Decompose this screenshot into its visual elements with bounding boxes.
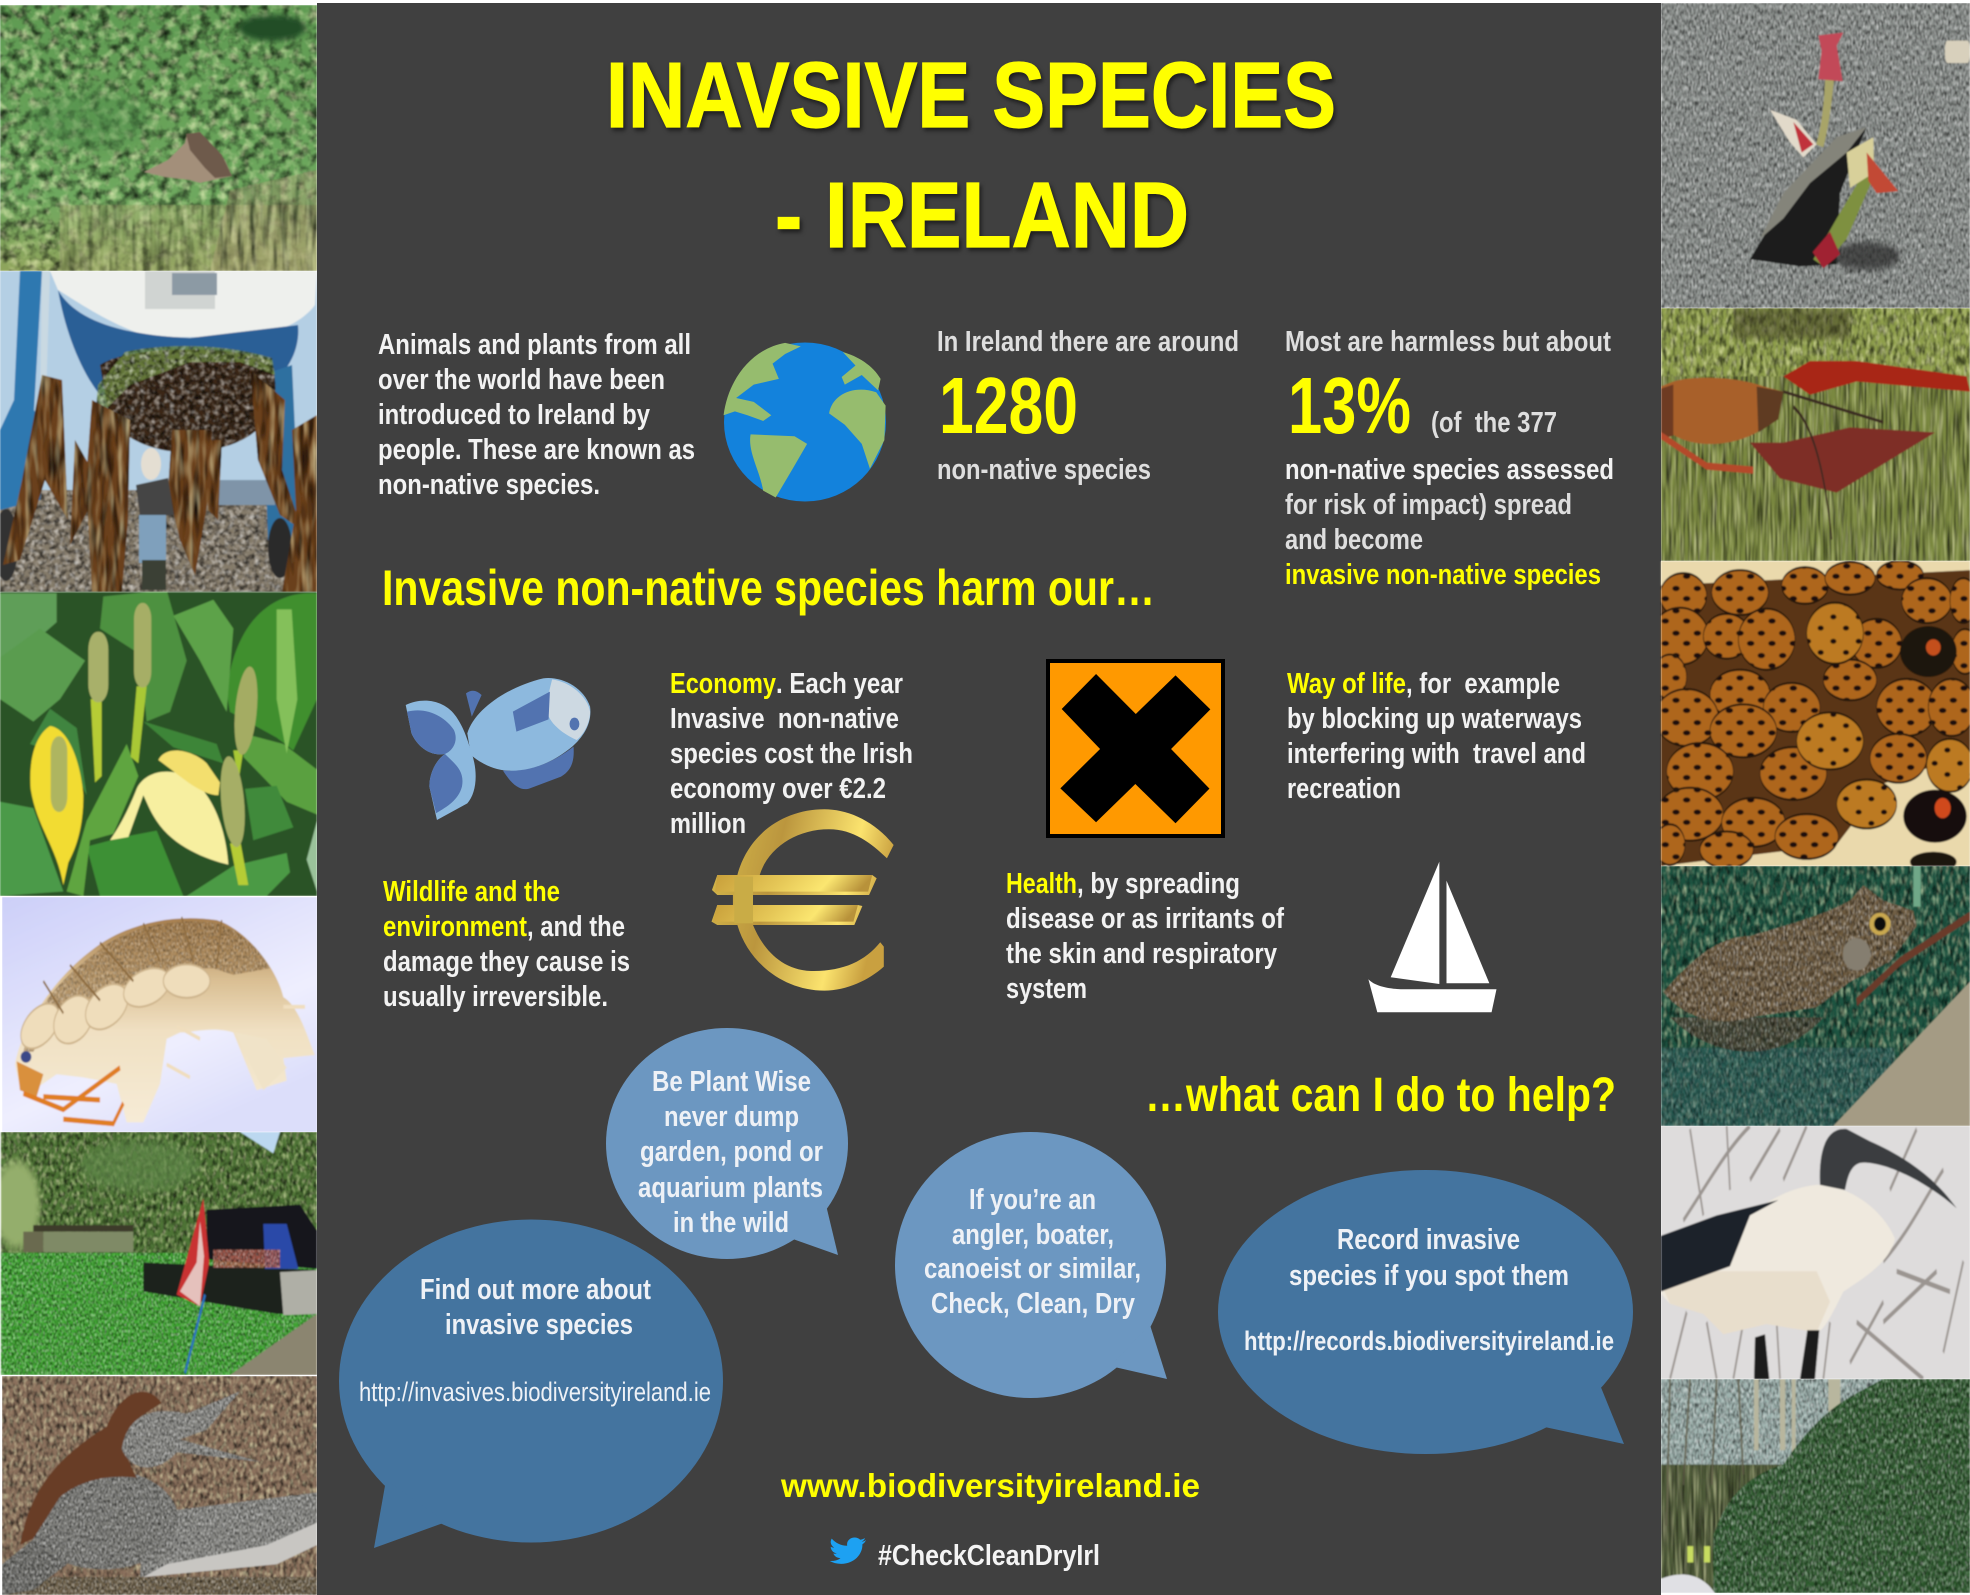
heading: harm: Invasive non-native species harm our…: [382, 560, 1155, 616]
icon: euro symbol: [711, 809, 894, 991]
photo: boat hull covered with seaweed: [0, 271, 317, 592]
text block: economy: economy over €2.2: [670, 773, 886, 805]
speech bubble: be plant wise: garden, pond or: [640, 1136, 823, 1168]
text block: introduction: over the world have been: [378, 364, 665, 396]
speech bubble: record species: http://records.biodiversityireland.ie: [1244, 1326, 1614, 1356]
text block: introduction: non-native species.: [378, 469, 600, 501]
text block: wildlife: environment: [383, 911, 527, 943]
stat: 13 percent invasive: (of the 377: [1431, 407, 1557, 439]
text block: health: [1006, 868, 1284, 1005]
text block: economy: Invasive non-native: [670, 703, 899, 735]
speech bubble: record species: [1218, 1170, 1633, 1454]
text block: wildlife: damage they cause is: [383, 946, 630, 978]
text block: economy: species cost the Irish: [670, 738, 913, 770]
photo: knotweed shoots in gravel: [1661, 3, 1970, 308]
text block: economy: [670, 668, 913, 840]
speech bubble: be plant wise: aquarium plants: [638, 1172, 823, 1204]
speech bubble: be plant wise: in the wild: [673, 1207, 789, 1239]
photo: bullfrog in water: [1661, 866, 1970, 1126]
speech bubble: find out more: invasive species: [445, 1309, 633, 1341]
photo: rhododendron thicket along a path: [1661, 1379, 1970, 1593]
text block: health: the skin and respiratory: [1006, 938, 1277, 970]
stat: 13 percent invasive: [1285, 326, 1614, 591]
icon: twitter bird: [830, 1538, 866, 1564]
stat: 13 percent invasive: Most are harmless but about: [1285, 326, 1611, 358]
stat: 13 percent invasive: non-native species assessed: [1285, 454, 1614, 486]
text block: economy: . Each year: [776, 668, 903, 700]
stat: 1280 non-native species: [937, 326, 1239, 486]
photo: signal crayfish: [1661, 308, 1970, 561]
title: [606, 43, 1336, 267]
text block: way of life: , for example: [1406, 668, 1560, 700]
text block: introduction: introduced to Ireland by: [378, 399, 650, 431]
text block: health: , by spreading: [1077, 868, 1240, 900]
speech bubble: check clean dry: Check, Clean, Dry: [931, 1288, 1135, 1320]
text block: health: disease or as irritants of: [1006, 903, 1284, 935]
stat: 1280 non-native species: 1280: [939, 361, 1078, 450]
photo: sacred ibis: [1661, 1126, 1970, 1379]
stat: 13 percent invasive: for risk of impact) spread: [1285, 489, 1572, 521]
photo: mink attacking gannet: [2, 1376, 317, 1595]
stat: 13 percent invasive: 13%: [1288, 361, 1411, 450]
speech bubble: be plant wise: Be Plant Wise: [652, 1066, 811, 1098]
text block: health: Health: [1006, 868, 1077, 900]
text block: health: system: [1006, 973, 1087, 1005]
title: - IRELAND: [775, 163, 1189, 267]
icon: sailing boat: [1368, 862, 1496, 1012]
speech bubble: record species: Record invasive: [1337, 1224, 1520, 1256]
text block: introduction: [378, 329, 695, 501]
title: INAVSIVE SPECIES: [606, 43, 1336, 147]
speech bubble: check clean dry: canoeist or similar,: [924, 1253, 1141, 1285]
heading: what can I do: …what can I do to help?: [1145, 1069, 1616, 1122]
speech bubble: find out more: Find out more about: [420, 1274, 651, 1306]
text block: economy: Economy: [670, 668, 776, 700]
speech bubble: check clean dry: If you’re an: [969, 1184, 1096, 1216]
icon: hazard sign: [1046, 659, 1225, 838]
text block: way of life: recreation: [1287, 773, 1401, 805]
text block: introduction: Animals and plants from all: [378, 329, 691, 361]
photo: harlequin ladybirds: [1652, 561, 1970, 872]
icon: fish: [406, 678, 590, 820]
icon: globe: [724, 342, 886, 502]
photo: canal covered in water plants with narrowboat: [0, 1132, 317, 1375]
text block: wildlife: Wildlife and the: [383, 876, 560, 908]
stat: 13 percent invasive: and become: [1285, 524, 1423, 556]
photo: water plant with sheep: [0, 5, 317, 271]
panel: dark background: [317, 3, 1661, 1595]
photo: freshwater amphipod: [2, 897, 317, 1132]
speech bubble: check clean dry: angler, boater,: [952, 1219, 1114, 1251]
text block: wildlife: , and the: [527, 911, 625, 943]
text block: wildlife: usually irreversible.: [383, 981, 608, 1013]
text block: way of life: Way of life: [1287, 668, 1406, 700]
text block: wildlife: [383, 876, 630, 1013]
speech bubble: be plant wise: [606, 1028, 848, 1259]
text block: way of life: by blocking up waterways: [1287, 703, 1582, 735]
speech bubble: record species: species if you spot them: [1289, 1260, 1569, 1292]
text block: introduction: people. These are known as: [378, 434, 695, 466]
speech bubble: check clean dry: [895, 1132, 1167, 1398]
speech bubble: find out more: http://invasives.biodiversityireland.ie: [359, 1377, 711, 1407]
photo: yellow skunk cabbage: [0, 590, 317, 896]
speech bubble: be plant wise: never dump: [664, 1101, 799, 1133]
stat: 1280 non-native species: non-native species: [937, 454, 1151, 486]
stat: 13 percent invasive: invasive non-native species: [1285, 559, 1601, 591]
hashtag: #CheckCleanDryIrl: [878, 1540, 1100, 1572]
text block: economy: million: [670, 808, 746, 840]
website link: www.biodiversityireland.ie: [780, 1467, 1200, 1504]
text block: way of life: interfering with travel and: [1287, 738, 1586, 770]
stat: 1280 non-native species: In Ireland there are around: [937, 326, 1239, 358]
text block: way of life: [1287, 668, 1586, 805]
speech bubble: find out more: [339, 1220, 723, 1548]
